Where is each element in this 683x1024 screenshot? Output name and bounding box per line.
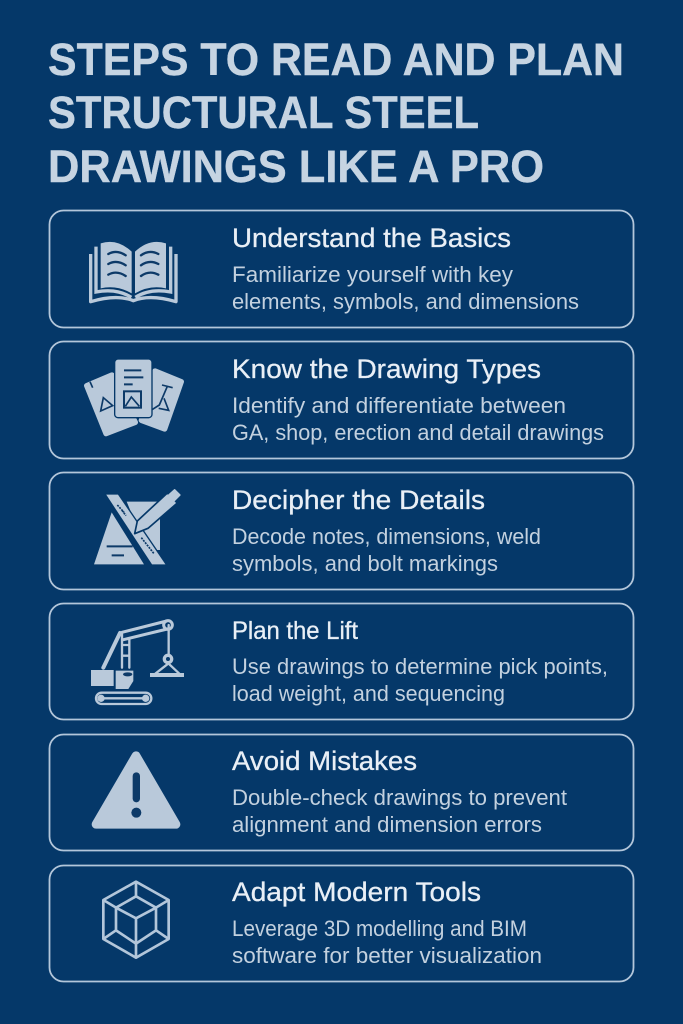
panel: decipher the details xyxy=(50,472,634,590)
panel: avoid mistakes xyxy=(50,734,634,850)
description xyxy=(232,916,542,968)
description: elements, symbols, and dimensions xyxy=(232,289,579,314)
panel: adapt modern tools xyxy=(50,866,634,982)
description: symbols, and bolt markings xyxy=(232,551,498,576)
panel: plan the lift xyxy=(50,604,634,720)
description: Leverage 3D modelling and BIM xyxy=(232,916,527,941)
description xyxy=(232,654,608,706)
title: STEPS TO READ AND PLAN xyxy=(48,34,624,85)
heading: Know the Drawing Types xyxy=(232,354,541,384)
description xyxy=(232,524,541,576)
description: Familiarize yourself with key xyxy=(232,262,513,287)
icon: set square, ruler and pencil xyxy=(94,490,180,565)
icon: open book xyxy=(91,242,176,302)
icon: crawler crane xyxy=(91,621,184,704)
description: alignment and dimension errors xyxy=(232,812,542,837)
description: load weight, and sequencing xyxy=(232,681,505,706)
icon: drawing sheets xyxy=(87,359,181,434)
panel: understand the basics xyxy=(50,210,634,328)
description: software for better visualization xyxy=(232,943,542,968)
description: Identify and differentiate between xyxy=(232,393,566,418)
heading: Adapt Modern Tools xyxy=(232,877,481,907)
description xyxy=(232,393,604,445)
icon: 3D wireframe cube xyxy=(103,882,169,958)
title: DRAWINGS LIKE A PRO xyxy=(48,141,544,192)
description: Use drawings to determine pick points, xyxy=(232,654,608,679)
heading: Decipher the Details xyxy=(232,485,485,515)
heading: Plan the Lift xyxy=(232,617,358,645)
description: GA, shop, erection and detail drawings xyxy=(232,420,604,445)
panel: know the drawing types xyxy=(50,342,634,458)
description: Double-check drawings to prevent xyxy=(232,785,567,810)
description xyxy=(232,785,567,837)
heading: Avoid Mistakes xyxy=(232,746,417,776)
icon: warning triangle xyxy=(96,756,176,824)
title: STRUCTURAL STEEL xyxy=(48,87,479,138)
description: Decode notes, dimensions, weld xyxy=(232,524,541,549)
heading: Understand the Basics xyxy=(232,223,511,253)
title xyxy=(48,34,624,192)
description xyxy=(232,262,579,314)
